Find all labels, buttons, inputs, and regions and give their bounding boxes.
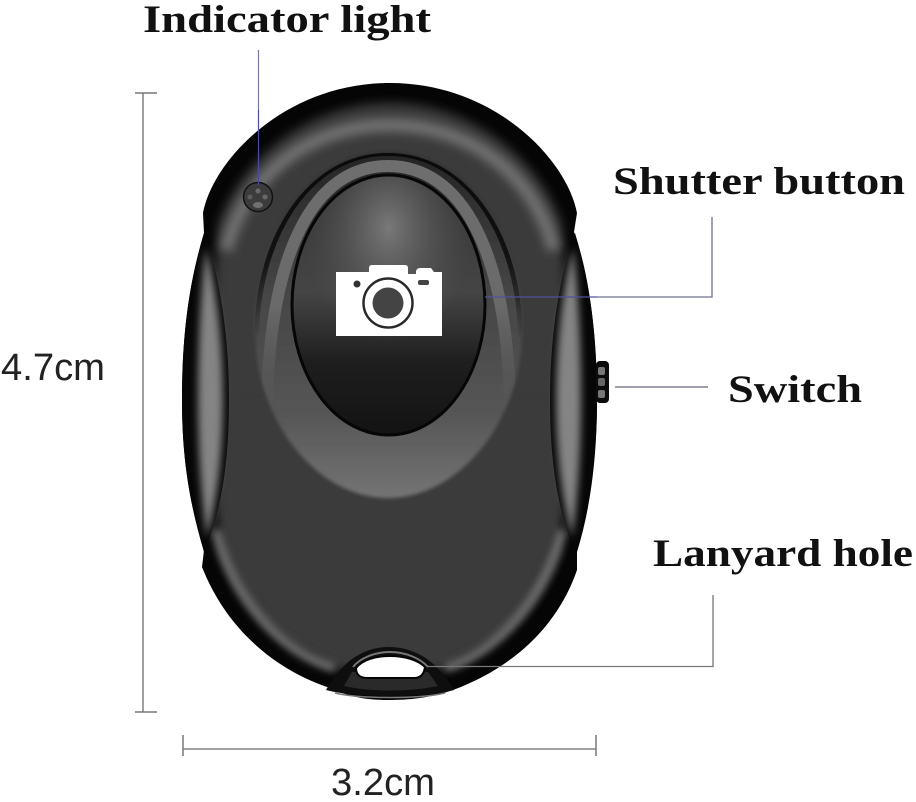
- callout: lanyard hole: Lanyard hole: [653, 532, 913, 575]
- callout: lanyard hole: [427, 532, 913, 666]
- device body: [170, 75, 610, 710]
- button surround: [255, 153, 522, 498]
- height dimension: [1, 93, 157, 712]
- callout: shutter button: [485, 160, 905, 297]
- callout: switch: Switch: [728, 368, 862, 411]
- left side grip: [182, 233, 229, 552]
- shutter button: [292, 175, 485, 435]
- device shell: [170, 75, 610, 710]
- switch: [596, 361, 609, 403]
- indicator light: [244, 182, 272, 212]
- right side grip: [550, 233, 597, 552]
- icon: camera: [336, 265, 442, 336]
- callout: shutter button: Shutter button: [613, 160, 905, 203]
- width dimension: [183, 735, 596, 802]
- lanyard hole: [326, 647, 454, 698]
- height label: 4.7cm: [1, 347, 105, 389]
